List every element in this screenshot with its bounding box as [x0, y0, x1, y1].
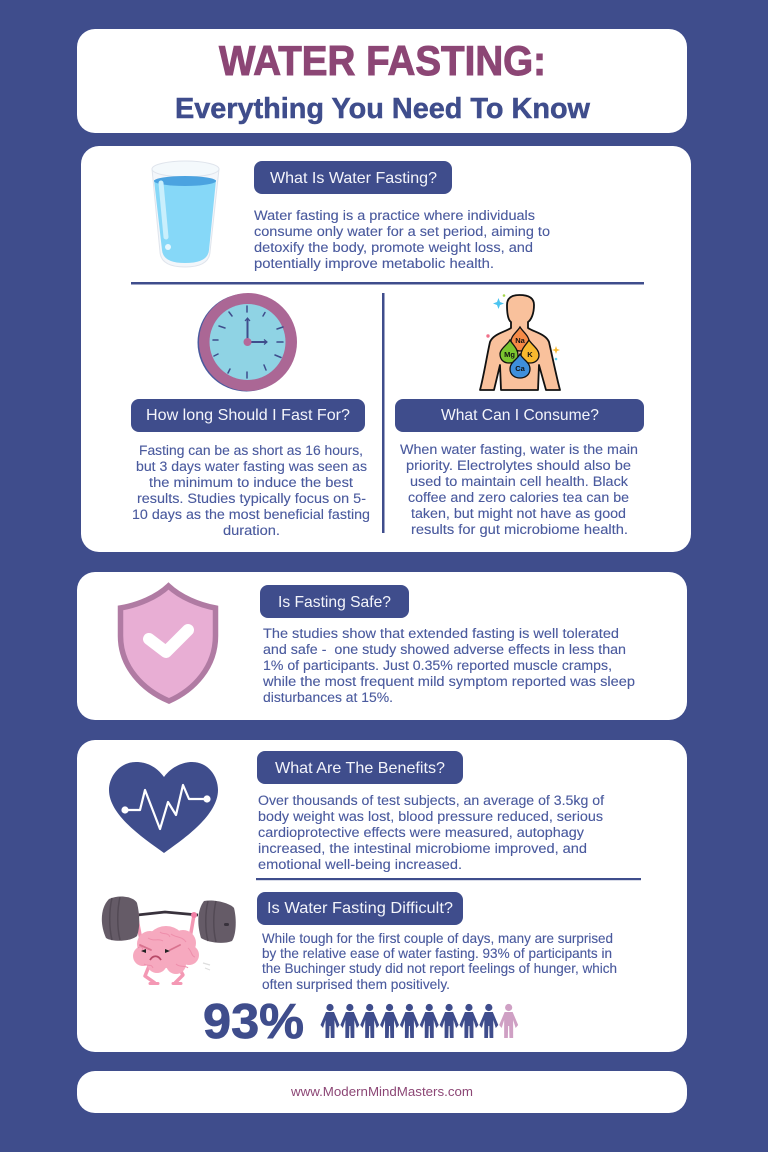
text block: what can be consumed: coffee and zero calories tea can be — [408, 490, 629, 506]
icon: body with electrolytes: Na — [515, 336, 526, 345]
panel: what is water fasting, duration and consumption — [81, 146, 691, 552]
statistic: 93%: 93% — [203, 995, 304, 1049]
icon: body with electrolytes: Ca — [515, 364, 526, 373]
heading pill: benefits: What Are The Benefits? — [275, 760, 445, 777]
heading: Water Fasting: WATER FASTING: — [219, 37, 546, 84]
text block: what can be consumed: taken, but might not have as good — [411, 506, 626, 522]
text block: difficulty: While tough for the first couple of days, many are surprised — [262, 931, 613, 946]
text block: benefits: increased, the intestinal microbiome improved, and — [258, 841, 587, 857]
pictogram: nine of ten people — [320, 1004, 518, 1038]
heading pill: what is water fasting — [254, 161, 452, 194]
heading pill: how long should I fast for — [131, 399, 365, 432]
text block: benefits: body weight was lost, blood pressure reduced, serious — [258, 809, 603, 825]
text block: what is water fasting — [254, 208, 550, 272]
heading pill: difficulty: Is Water Fasting Difficult? — [267, 900, 453, 917]
text block: difficulty: the Buchinger study did not report feelings of hunger, which — [262, 961, 617, 976]
text block: fasting duration: but 3 days water fasting was seen as — [136, 459, 367, 475]
icon: body with electrolytes: K — [527, 350, 533, 359]
heading pill: difficulty — [257, 892, 463, 925]
text block: difficulty: by the relative ease of water fasting. 93% of participants in — [262, 946, 612, 961]
text block: what can be consumed — [400, 442, 638, 538]
subheading: Everything You Need To Know — [175, 93, 590, 125]
text block: safety: The studies show that extended fasting is well tolerated — [263, 626, 619, 642]
text block: what is water fasting: detoxify the body, promote weight loss, and — [254, 240, 533, 256]
text block: benefits: cardioprotective effects were measured, autophagy — [258, 825, 585, 841]
heading pill: what can I consume — [395, 399, 644, 432]
panel: benefits and difficulty — [77, 740, 687, 1052]
text block: benefits — [258, 793, 604, 873]
icon: shield with check — [120, 586, 216, 701]
text block: difficulty: often surprised them positively. — [262, 977, 450, 992]
icon: body with electrolytes: Mg — [504, 350, 515, 359]
icon: glass of water — [152, 161, 219, 267]
text block: safety: 1% of participants. Just 0.35% reported muscle cramps, — [263, 658, 612, 674]
text block: fasting duration — [132, 443, 370, 539]
text block: what is water fasting: Water fasting is a practice where individuals — [254, 208, 535, 224]
text block: safety — [262, 626, 635, 706]
panel: footer: www.ModernMindMasters.com — [290, 1084, 473, 1099]
text block: benefits: emotional well-being increased. — [258, 857, 462, 873]
text block: what can be consumed: priority. Electrolytes should also be — [406, 458, 631, 474]
text block: what can be consumed: When water fasting, water is the main — [400, 442, 638, 458]
text block: safety: while the most frequent mild symptom reported was sleep — [262, 674, 635, 690]
text block: fasting duration: results. Studies typically focus on 5- — [137, 491, 366, 507]
text block: fasting duration: duration. — [223, 523, 280, 539]
heading pill: how long should I fast for: How long Should I Fast For? — [146, 407, 350, 424]
heading pill: is fasting safe — [260, 585, 409, 618]
panel: footer — [77, 1071, 687, 1113]
panel: is fasting safe — [77, 572, 687, 720]
text block: what can be consumed: used to maintain cell health. Black — [410, 474, 629, 490]
text block: benefits: Over thousands of test subjects, an average of 3.5kg of — [258, 793, 604, 809]
heading pill: what can I consume: What Can I Consume? — [441, 407, 599, 424]
text block: what can be consumed: results for gut microbiome health. — [411, 522, 628, 538]
icon: body with electrolytes — [480, 294, 560, 390]
text block: safety: and safe - one study showed adverse effects in less than — [263, 642, 626, 658]
text block: what is water fasting: consume only water for a set period, aiming to — [254, 224, 550, 240]
text block: difficulty — [262, 931, 617, 992]
text block: fasting duration: Fasting can be as short as 16 hours, — [139, 443, 363, 459]
text block: what is water fasting: potentially improve metabolic health. — [254, 256, 494, 272]
icon: brain lifting barbell — [102, 896, 236, 984]
text block: safety: disturbances at 15%. — [263, 690, 393, 706]
icon: heart with pulse — [109, 762, 218, 853]
text block: fasting duration: 10 days as the most beneficial fasting — [132, 507, 370, 523]
icon: wall clock — [198, 293, 297, 392]
heading pill: what is water fasting: What Is Water Fasting? — [270, 170, 437, 187]
heading pill: is fasting safe: Is Fasting Safe? — [278, 594, 391, 611]
text block: fasting duration: the minimum to induce the best — [149, 475, 353, 491]
panel: title — [77, 29, 687, 133]
heading pill: benefits — [257, 751, 463, 784]
